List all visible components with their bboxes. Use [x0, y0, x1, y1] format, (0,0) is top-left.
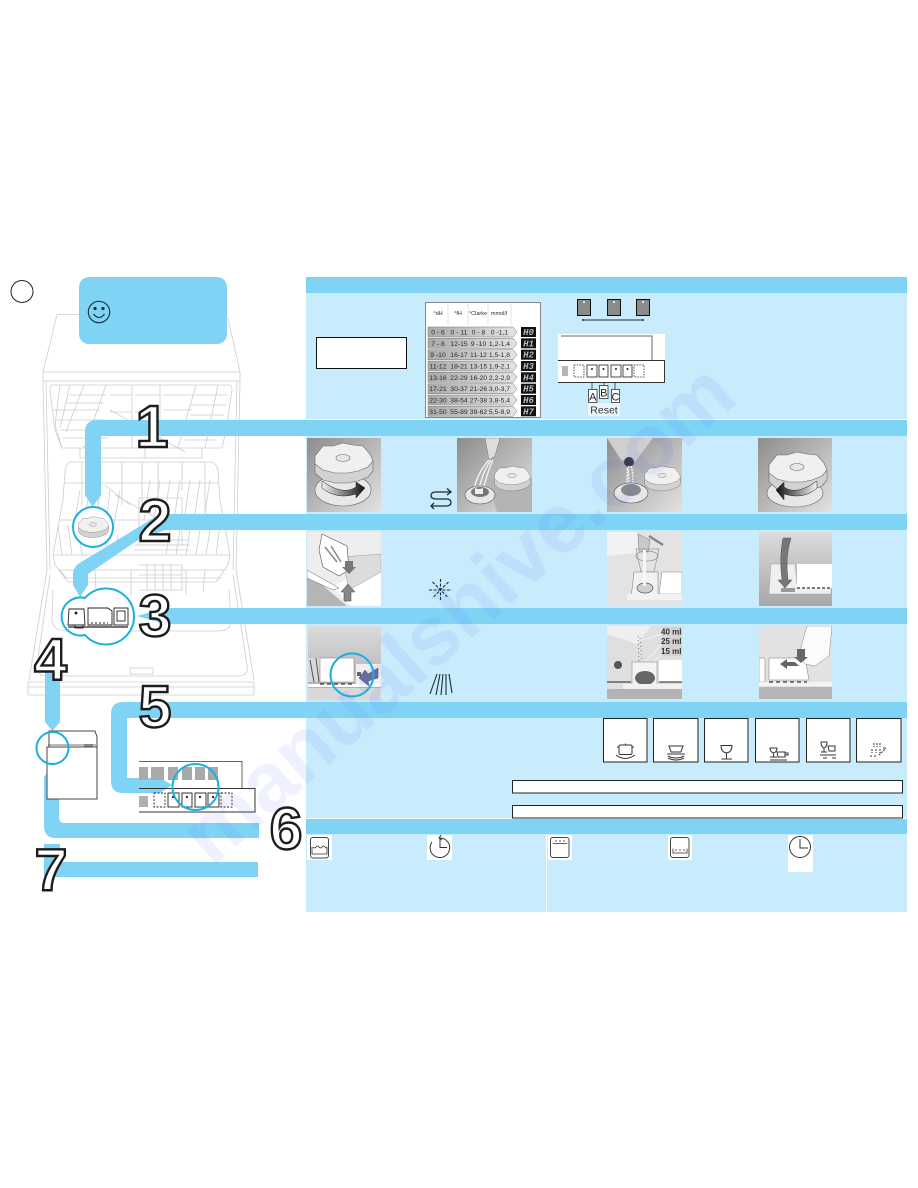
table row H2: 11-12: [470, 352, 487, 359]
step number 4: 4: [34, 627, 67, 693]
button A B C labels: [588, 383, 620, 404]
table row H6: 38-54: [450, 398, 468, 404]
programme: spray: [856, 718, 901, 762]
control panel with reset buttons: [558, 334, 665, 416]
programme: glass: [704, 718, 748, 762]
programme icons: [604, 718, 901, 762]
image: opening detergent lid: [308, 626, 381, 700]
table row H7: 39-62: [470, 409, 487, 416]
dose labels: 40 ml: [661, 628, 682, 636]
table row H3: 18-21: [450, 364, 468, 370]
icon: top spray indicator: [548, 835, 572, 860]
icon: spray lines: [430, 674, 452, 695]
watermark: manualshive.com: [162, 344, 752, 881]
table row H1: H1: [523, 339, 534, 349]
control buttons: [154, 793, 232, 807]
table header: mmol/l: [491, 311, 507, 317]
connector band: step 6: [44, 765, 259, 838]
table row H1: 7 - 8: [431, 341, 445, 348]
connector band: step 2: [73, 514, 907, 597]
reset label: Reset: [590, 404, 618, 416]
image: closing detergent lid: [759, 626, 832, 699]
white info bar 1: [512, 780, 902, 793]
highlight circle: dispenser: [62, 588, 134, 644]
table row H7: [428, 406, 536, 417]
image: open salt cap: [307, 438, 381, 512]
table row H5: 17-21: [429, 386, 447, 393]
header band: step 6 panel: [306, 819, 907, 834]
panel: rinse aid background: [306, 530, 907, 608]
programme: glass, cup and half load: [806, 718, 850, 762]
table row H5: 21-26: [470, 386, 487, 393]
dishwasher line drawing: [28, 314, 254, 695]
table row H0: 0 - 8: [472, 330, 486, 336]
icon: sparkle indicator: [429, 579, 452, 601]
connector band: step 4: [45, 666, 60, 731]
step number 6: 6: [270, 796, 302, 862]
band: detergent section top: [306, 608, 907, 624]
table row H4: 2,2-2,9: [489, 375, 510, 382]
table row H4: 16-20: [470, 375, 487, 382]
image: closing rinse aid lid: [759, 532, 832, 606]
white info bar 2: [512, 806, 902, 818]
control panel illustration: [139, 762, 255, 812]
seven segment tile: [139, 796, 148, 807]
button A B C labels: B: [600, 388, 607, 400]
dose labels: [661, 627, 682, 656]
three setting buttons with bracket: [578, 300, 650, 321]
table row H6: 3,8-5,4: [489, 398, 510, 404]
table row H1: 12-15: [450, 341, 468, 348]
step number 3: 3: [139, 583, 171, 649]
icon: bottom spray indicator: [668, 835, 692, 860]
image: pouring water: [457, 438, 532, 512]
step number 7: 7: [35, 837, 67, 903]
table row H7: H7: [523, 407, 534, 417]
image: closing salt cap: [758, 438, 832, 512]
highlight circle: door handle: [36, 732, 68, 764]
connector band: step 3: [137, 608, 907, 624]
panel: water softener settings background: [306, 293, 907, 419]
table row H5: H5: [523, 385, 534, 395]
table row H4: 13-16: [429, 375, 447, 382]
icon: smiley: [88, 301, 110, 323]
image: opening rinse aid lid: [307, 532, 381, 606]
language marker circle: [11, 280, 33, 302]
callout with smiley: [79, 277, 227, 344]
panel: detergent background: [306, 624, 907, 702]
table row H0: H0: [523, 328, 534, 338]
table row H2: H2: [523, 351, 534, 361]
table row H3: 11-12: [430, 364, 447, 370]
water hardness table: [426, 302, 540, 418]
table row H5: 3,0-3,7: [489, 386, 510, 393]
dose labels: 15 ml: [661, 647, 682, 656]
image: filling detergent with dose levels: [607, 626, 682, 699]
table row H7: 55-89: [450, 409, 468, 416]
programme display blocks: [139, 767, 218, 780]
table row H6: [428, 395, 536, 406]
table row H2: 9 -10: [430, 352, 446, 359]
table row H6: H6: [523, 396, 534, 406]
icon: repeat arrows: [431, 488, 451, 509]
table row H2: 16-17: [450, 352, 468, 359]
header band: top: [306, 277, 907, 293]
table row H7: 31-50: [429, 409, 447, 416]
table row H1: 1,2-1,4: [489, 341, 510, 348]
panel: programme selection background: [306, 718, 907, 818]
button A B C labels: A: [589, 392, 597, 404]
connector band: step 7: [44, 844, 258, 877]
step number 5: 5: [139, 674, 171, 740]
icon: salt cap: [78, 517, 109, 537]
table row H3: [428, 361, 536, 372]
step number 1: 1: [136, 394, 168, 460]
connector band: step 1: [85, 420, 907, 507]
table row H4: 22-29: [450, 375, 468, 382]
band: salt section top: [306, 420, 907, 436]
connector band: step 5: [111, 702, 907, 793]
table row H3: 13-15: [470, 364, 487, 370]
dose labels: 25 ml: [661, 637, 682, 646]
panel: status indicators left background: [306, 834, 546, 912]
icon: clock: [788, 835, 813, 872]
small appliance with control panel: [47, 731, 97, 799]
table row H2: 1,5-1,8: [489, 352, 510, 359]
table header: °Clarke: [469, 311, 487, 317]
table row H4: [428, 372, 536, 383]
panel: salt refill background: [306, 436, 907, 514]
table row H6: 22-30: [429, 398, 447, 404]
table row H1: [428, 338, 536, 349]
band: programmes section top: [306, 702, 907, 718]
table row H6: 27-38: [470, 398, 487, 404]
step number 2: 2: [139, 488, 171, 554]
table row H0: [428, 327, 536, 338]
table row H7: 5,5-8,9: [489, 409, 510, 416]
table row H2: [428, 350, 536, 361]
table header: [433, 311, 507, 317]
table row H5: 30-37: [450, 386, 468, 393]
image: filling rinse aid: [607, 532, 682, 606]
buttons row: [574, 365, 644, 377]
icon: clock with arrow: [427, 835, 452, 860]
table row H0: 0 - 6: [431, 330, 445, 336]
table row H1: 9 -10: [471, 341, 486, 348]
table row H3: H3: [523, 362, 534, 372]
table row H3: 1,9-2,1: [489, 364, 510, 370]
table header: °fH: [454, 311, 462, 317]
seven segment tile: [562, 366, 568, 376]
table header: °dH: [433, 311, 443, 317]
image: adding salt: [607, 438, 682, 512]
table row H0: 0 -1,1: [491, 330, 508, 336]
band: rinse aid section top: [306, 514, 907, 530]
programme: glass and cup: [756, 718, 799, 762]
icon: dispenser: [68, 608, 128, 628]
empty note box: [316, 338, 406, 368]
button A B C labels: C: [612, 392, 620, 404]
highlight circle: salt cap: [73, 507, 113, 547]
programme: plates: [654, 718, 698, 762]
table row H0: 0 - 11: [451, 330, 468, 336]
icon: water level indicator: [307, 835, 332, 860]
panel: status indicators right background: [547, 834, 907, 912]
table row H5: [428, 384, 536, 395]
highlight circle: programme buttons: [172, 764, 218, 810]
table row H4: H4: [523, 373, 534, 383]
programme: pots: [604, 718, 647, 762]
